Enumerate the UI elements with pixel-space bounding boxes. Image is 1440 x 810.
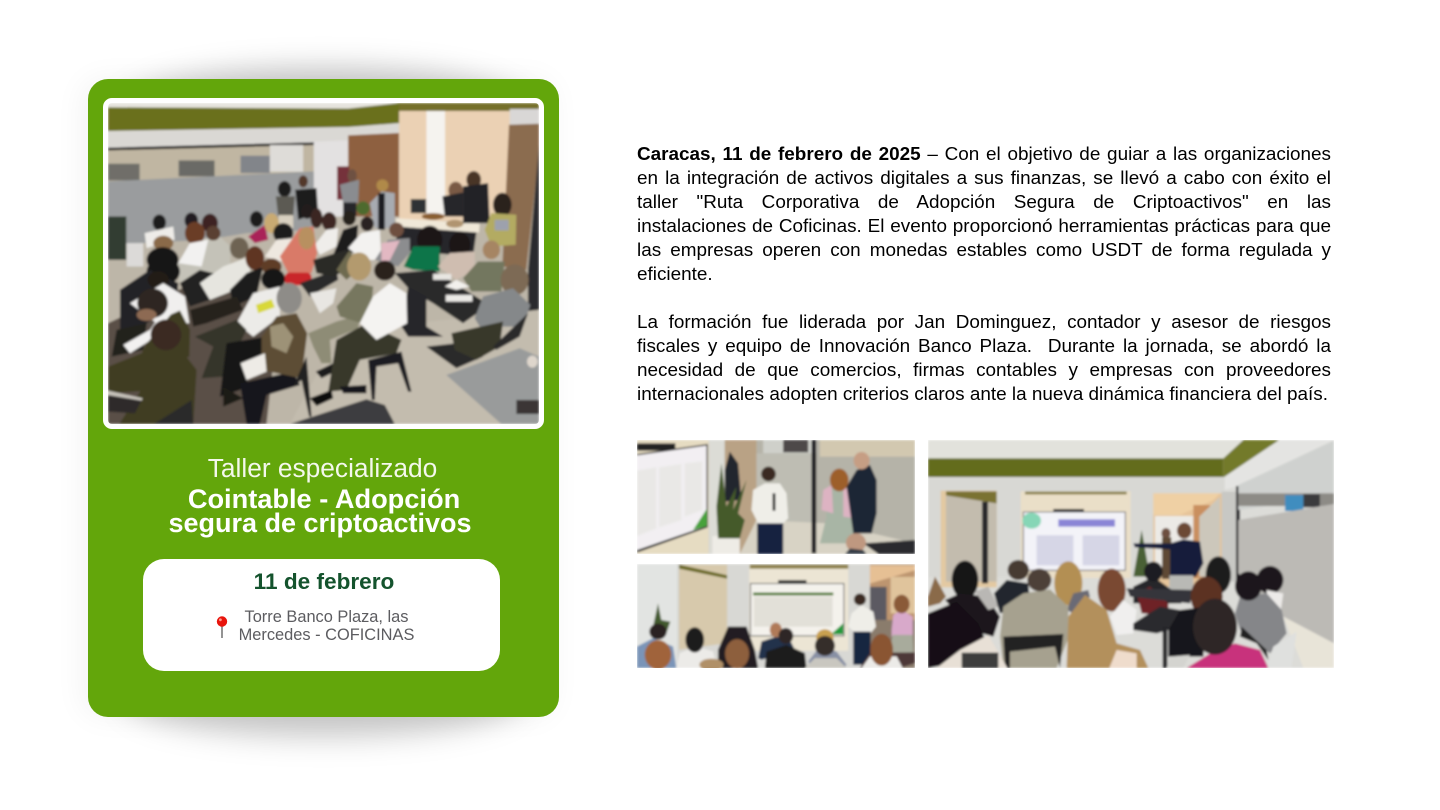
panel: event card [88, 79, 559, 717]
photo: speaker addressing audience [928, 440, 1334, 668]
text block: article: fiscales y equipo de Innovación Banco Plaza. Durante la jornada, se abordó la [637, 336, 1331, 357]
text block: article: Caracas, 11 de febrero de 2025 – Con el objetivo de guiar a las organizaciones [637, 144, 1331, 165]
date: 11 de febrero [254, 569, 394, 594]
audience [928, 577, 946, 607]
photo: speakers beside screen [637, 440, 915, 554]
text block: article: internacionales adopten criterios claros ante la nueva dinámica financiera del país. [637, 384, 1328, 405]
counter area [411, 199, 426, 213]
rug [446, 348, 539, 424]
text block: article: necesidad de que comercios, firmas contables y empresas con proveedores [637, 360, 1331, 381]
text block: article: La formación fue liderada por Jan Dominguez, contador y asesor de riesgos [637, 312, 1331, 333]
text block: article: en la integración de activos digitales a sus finanzas, se llevó a cabo con éxito el [637, 168, 1331, 189]
front left men [148, 271, 169, 289]
text block: article [637, 144, 1331, 405]
title [168, 453, 472, 538]
location text: Mercedes - COFICINAS [239, 626, 414, 644]
text block: article: instalaciones de Coficinas. El evento proporcionó herramientas prácticas para que [637, 216, 1331, 237]
icon: location pin [216, 616, 228, 638]
location text [239, 608, 414, 644]
left crowd [108, 216, 126, 260]
text block: article: eficiente. [637, 264, 713, 285]
photo: presenter with comparison slide [637, 564, 915, 668]
table [395, 270, 489, 323]
title: workshop name line 1: Cointable - Adopción [188, 483, 460, 514]
text block: article: taller "Ruta Corporativa de Adopción Segura de Criptoactivos" en las [637, 192, 1331, 213]
title: workshop name line 2: segura de criptoactivos [168, 508, 472, 538]
back row [153, 214, 166, 230]
title: workshop label: Taller especializado [208, 453, 437, 483]
leopard woman [240, 372, 300, 424]
woman grey jacket [501, 265, 529, 295]
main photo frame: audience at workshop [103, 98, 544, 429]
standing people [278, 181, 291, 197]
location text: Torre Banco Plaza, las [244, 608, 408, 626]
centre front [308, 315, 360, 363]
text block: article: las empresas operen con monedas estables como USDT de forma regulada y [637, 240, 1331, 261]
callout: date and place [143, 559, 500, 671]
